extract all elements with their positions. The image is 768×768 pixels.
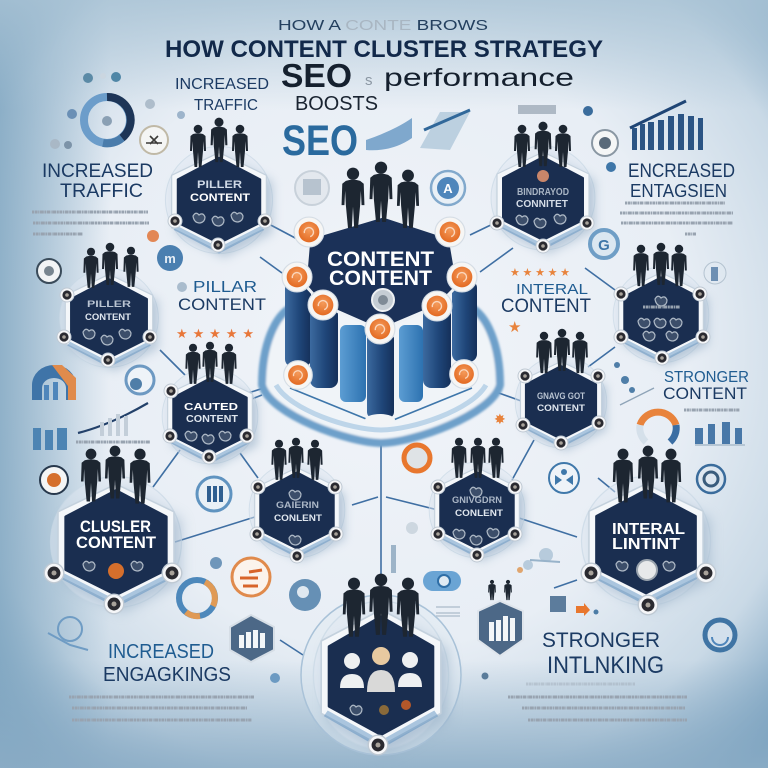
strip of small top icons bbox=[518, 105, 618, 172]
label: pillar content left: CONTENT bbox=[178, 295, 266, 314]
base rings bbox=[262, 307, 500, 443]
icon: sketch cluster bbox=[517, 548, 560, 573]
people bbox=[343, 574, 419, 637]
icon: hex bar chart lower left bbox=[230, 615, 274, 662]
node label bbox=[184, 402, 238, 425]
icon: line chart bbox=[78, 403, 148, 436]
text block: illegible body copy bbox=[508, 684, 687, 720]
people bbox=[81, 446, 150, 504]
heading bbox=[542, 629, 664, 679]
label: pillar content left: PILLAR bbox=[193, 279, 257, 296]
title: SEO performance line: s bbox=[365, 72, 372, 89]
node label: PILLER bbox=[197, 179, 242, 191]
icon: donut chart bbox=[84, 97, 131, 143]
title: SEO performance line: performance bbox=[384, 64, 574, 92]
people bbox=[613, 446, 681, 502]
panel: increased traffic left bbox=[32, 97, 153, 234]
heading: ENGAGKINGS bbox=[103, 664, 231, 686]
icon: orange ring gavel bbox=[232, 558, 270, 596]
icon: small bars right bbox=[695, 422, 745, 446]
icons: lower left cluster bbox=[40, 466, 321, 650]
node label bbox=[85, 299, 131, 323]
small left icons bbox=[37, 230, 183, 283]
connector lines bbox=[153, 222, 615, 655]
node label: LINTINT bbox=[612, 536, 681, 553]
heading bbox=[103, 641, 231, 686]
people bbox=[514, 122, 571, 167]
heading: increased traffic: INCREASED bbox=[42, 161, 153, 182]
title: main heading: HOW CONTENT CLUSTER STRATEGY bbox=[165, 36, 603, 63]
heading: STRONGER bbox=[542, 629, 660, 652]
node label: CAUTED bbox=[184, 402, 238, 413]
node label: INTERAL bbox=[612, 521, 685, 538]
icon: pillars ring bbox=[197, 477, 231, 511]
node label: BINDRAYOD bbox=[517, 187, 569, 198]
people bbox=[83, 243, 139, 288]
node: pillar content bbox=[165, 118, 273, 258]
title: boosts: BOOSTS bbox=[295, 93, 378, 115]
orange nodes bbox=[282, 217, 478, 389]
hub label bbox=[327, 248, 434, 290]
heading: INCREASED bbox=[108, 641, 214, 663]
node scribbled content bbox=[638, 296, 682, 341]
people bbox=[536, 329, 588, 373]
label: increased traffic top: INCREASED bbox=[175, 76, 269, 93]
icon: outline figure bbox=[704, 262, 726, 284]
node label bbox=[516, 187, 569, 210]
icon: small bar group bbox=[33, 428, 150, 450]
star icon: ★ bbox=[508, 319, 521, 336]
icon: sketch bbox=[48, 617, 88, 650]
label: internal content: CONTENT bbox=[501, 296, 591, 317]
portraits bbox=[340, 647, 422, 692]
node: bottom team bbox=[301, 574, 461, 755]
icon: blue orange donut bbox=[179, 580, 215, 616]
node label: CONTENT bbox=[186, 414, 238, 425]
icon: hex bar chart lower right bbox=[478, 580, 523, 656]
text block: illegible body copy bbox=[620, 203, 733, 234]
node label: GNIVGDRN bbox=[452, 495, 502, 506]
node label bbox=[274, 500, 322, 524]
title block bbox=[165, 17, 603, 165]
node label: CONTENT bbox=[537, 403, 585, 414]
people bbox=[190, 118, 248, 167]
people bbox=[633, 243, 687, 286]
hub label: CONTENT bbox=[329, 267, 432, 290]
node label bbox=[537, 391, 585, 414]
people bbox=[451, 438, 504, 478]
heading: INTLNKING bbox=[547, 652, 664, 679]
heading: increased traffic bbox=[42, 161, 153, 202]
icon: blue A badge: A bbox=[443, 181, 453, 196]
node label: CONNITET bbox=[516, 199, 568, 210]
icon: arch chart bbox=[32, 365, 76, 400]
icon: orange blue donut bbox=[640, 412, 676, 442]
icon: stacked lines bbox=[436, 607, 460, 616]
icon: sketch circle left of hub bbox=[295, 171, 329, 205]
title: SEO performance line: SEO bbox=[281, 57, 352, 94]
stars: ★★★★★ bbox=[510, 267, 570, 279]
columns bbox=[285, 280, 477, 426]
stars: ★★★★★ bbox=[176, 326, 254, 341]
heading: ENTAGSIEN bbox=[630, 181, 727, 201]
hub label: CONTENT bbox=[327, 248, 434, 271]
node: cluster content large bbox=[44, 446, 182, 614]
icon: top swoosh chart bbox=[366, 110, 470, 150]
people bbox=[185, 342, 237, 384]
icon: rising bar chart bbox=[630, 101, 703, 150]
node label bbox=[190, 179, 250, 204]
title: small overline: HOW A CONTE BROWS bbox=[278, 17, 488, 34]
node: right upper bbox=[613, 243, 710, 367]
node label bbox=[612, 521, 685, 553]
label: stronger content bbox=[663, 369, 749, 403]
node: middle right bbox=[515, 329, 607, 451]
node: top right content bbox=[490, 122, 595, 254]
heading bbox=[628, 161, 735, 201]
heading: increased traffic: TRAFFIC bbox=[60, 181, 143, 202]
node: internal linking large bbox=[581, 446, 716, 615]
icon: blue G badge: G bbox=[598, 237, 610, 254]
label: pillar content left bbox=[176, 279, 266, 341]
node label: GNAVG GOT bbox=[537, 391, 585, 402]
icon: small scribble cluster right bbox=[614, 362, 654, 405]
central hub: pillar content stack bbox=[262, 162, 500, 443]
heading: ENCREASED bbox=[628, 161, 735, 182]
panel: increased engagings bbox=[69, 641, 254, 720]
people bbox=[271, 438, 323, 480]
node label bbox=[452, 495, 503, 519]
node label: CLUSLER bbox=[80, 517, 151, 536]
title: blue SEO: SEO bbox=[282, 117, 358, 165]
icon: small square and orange arrow bbox=[550, 596, 598, 616]
label: stronger content: CONTENT bbox=[663, 384, 747, 403]
icon: blue arrows ring bbox=[549, 463, 579, 493]
hub people bbox=[342, 162, 419, 228]
node label: CONTENT bbox=[190, 192, 250, 204]
icon: orange ring bbox=[404, 445, 430, 471]
title: SEO performance line bbox=[281, 57, 574, 94]
node: small centre right bbox=[429, 438, 525, 562]
icon: small dot bbox=[210, 557, 222, 569]
hub hexagon bbox=[305, 216, 458, 330]
icon: badge bbox=[40, 466, 68, 494]
label: internal content: INTERAL bbox=[516, 281, 588, 298]
panel: stronger interlinking bbox=[508, 629, 687, 720]
icon: blue disc bbox=[289, 579, 321, 611]
icon: blue A badge bbox=[431, 171, 465, 205]
node: small centre left bbox=[249, 438, 345, 563]
label: increased traffic top: TRAFFIC bbox=[194, 97, 258, 114]
label: stronger content: STRONGER bbox=[664, 369, 749, 386]
small icons top left bbox=[50, 72, 185, 154]
node label: CONTENT bbox=[85, 312, 131, 323]
icons: lower right cluster bbox=[391, 445, 735, 680]
node label: CONLENT bbox=[455, 508, 503, 519]
icon: orange accent near hub: ✸ bbox=[494, 411, 506, 427]
text block: illegible body copy bbox=[32, 212, 149, 234]
hub small lens icon bbox=[372, 289, 394, 311]
node: left content bbox=[57, 243, 158, 371]
icon: blue link pill bbox=[423, 571, 461, 591]
icon: blue G badge bbox=[590, 230, 618, 258]
node label: GAIERIN bbox=[276, 500, 319, 511]
icon: right ring bbox=[697, 465, 725, 493]
icon: blue ring smile bbox=[705, 620, 735, 650]
small left icons: m bbox=[164, 251, 176, 266]
text block: illegible body copy bbox=[69, 697, 254, 720]
node: small cluster left bbox=[162, 342, 258, 468]
node label: CONLENT bbox=[274, 513, 322, 524]
label: increased traffic top bbox=[175, 76, 269, 114]
panel: increased engagement right bbox=[620, 161, 735, 234]
node label bbox=[76, 517, 157, 552]
node label: PILLER bbox=[87, 299, 131, 310]
outer rings bbox=[301, 595, 461, 755]
label: internal content bbox=[501, 267, 591, 336]
node label: CONTENT bbox=[76, 533, 157, 552]
small text line above bars bbox=[684, 408, 740, 412]
icon: dot and tower bbox=[391, 522, 488, 680]
icon: globe outline bbox=[126, 366, 154, 394]
